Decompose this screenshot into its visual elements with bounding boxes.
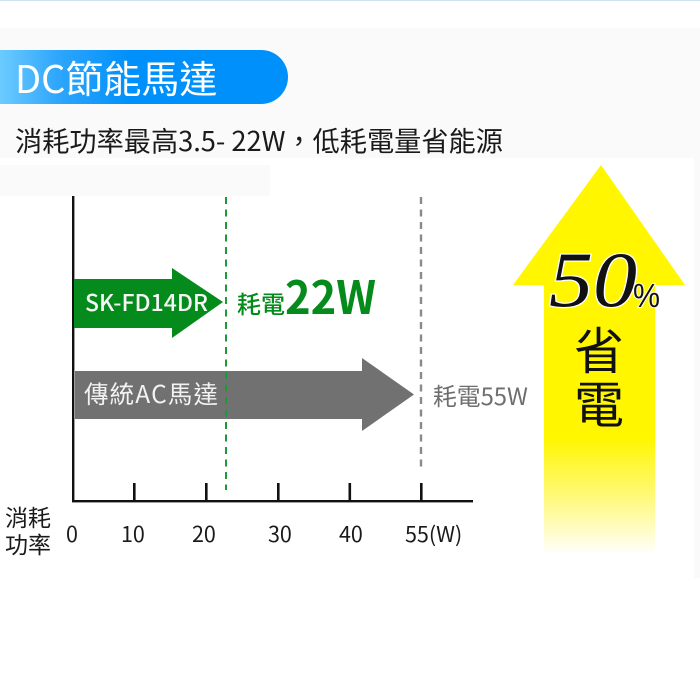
label: 55W consumption: 耗電55W: [433, 377, 528, 412]
title banner: [0, 50, 288, 104]
y axis: [72, 196, 74, 502]
50 percent: 50: [549, 236, 637, 323]
green arrow: SK-FD14DR: [74, 268, 223, 338]
x axis values: 20: [192, 518, 216, 549]
gray dashed line at 55W: [420, 197, 422, 468]
x axis values: [66, 518, 462, 549]
x axis values: 55(W): [405, 518, 462, 549]
label: 22W consumption: [237, 262, 376, 328]
subtitle: 消耗功率最高3.5- 22W，低耗電量省能源: [15, 119, 503, 159]
x axis title: [5, 499, 51, 560]
x axis title: 消耗: [5, 499, 51, 533]
label: 22W consumption: 22W: [285, 262, 376, 328]
save electricity text: 電: [574, 366, 624, 438]
x axis with ticks: [72, 483, 473, 502]
label: 22W consumption: 耗電: [237, 285, 285, 320]
x axis title: 功率: [5, 526, 51, 560]
gray arrow: traditional AC motor: [75, 358, 414, 431]
gray arrow label: 傳統AC馬達: [84, 376, 218, 411]
save electricity text: [574, 312, 624, 438]
green arrow label: SK-FD14DR: [85, 284, 208, 318]
green dashed line at 22W: [225, 197, 227, 490]
title text: DC節能馬達: [15, 49, 217, 104]
save electricity text: 省: [574, 312, 624, 384]
x axis values: 40: [339, 518, 363, 549]
x axis values: 0: [66, 518, 78, 549]
x axis values: 30: [268, 518, 292, 549]
x axis values: 10: [121, 518, 145, 549]
yellow up arrow: [513, 165, 685, 555]
50 percent: %: [633, 277, 660, 314]
